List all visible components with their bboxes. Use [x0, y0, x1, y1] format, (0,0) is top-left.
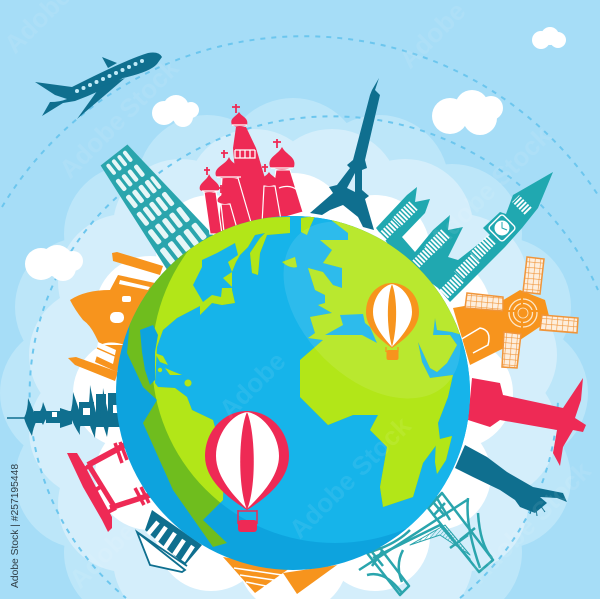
- small orange hot air balloon: [366, 283, 419, 360]
- small white clouds: [25, 27, 566, 281]
- orange pyramids: [223, 557, 337, 594]
- leaning tower of Pisa: [91, 137, 214, 271]
- stock watermarks: Adobe: [53, 106, 131, 184]
- windmill: [453, 257, 578, 368]
- Statue of Liberty: [455, 445, 567, 516]
- stock watermarks: Adobe Stock: [423, 120, 557, 254]
- bottom lattice tower: [359, 493, 493, 595]
- Westminster and Big Ben: [376, 172, 553, 302]
- columned temple: [137, 510, 202, 572]
- torii gate: [67, 442, 150, 532]
- airplane: [35, 52, 162, 119]
- stock watermarks: Adobe Stock: [463, 455, 597, 589]
- large red hot air balloon: [205, 411, 289, 532]
- stock watermarks: Adobe: [63, 516, 141, 594]
- Christ the Redeemer: [468, 378, 586, 466]
- stock watermarks: Stock: [113, 53, 185, 124]
- image ID credit: Adobe Stock | #257195448: [10, 464, 21, 588]
- cloud layer: white inner: [73, 173, 513, 599]
- pagoda: [7, 385, 122, 438]
- seas and inlets: [193, 243, 377, 343]
- stock watermarks: Adobe: [213, 346, 291, 424]
- stock watermarks: Adobe Stock: [283, 410, 417, 544]
- globe: [116, 216, 470, 570]
- Taj Mahal silhouette: [68, 252, 163, 381]
- Eiffel tower: [310, 78, 380, 230]
- Saint Basil's cathedral: [200, 104, 303, 234]
- polar highlight: [284, 222, 460, 398]
- cloud layer: middle very pale blue: [29, 129, 557, 599]
